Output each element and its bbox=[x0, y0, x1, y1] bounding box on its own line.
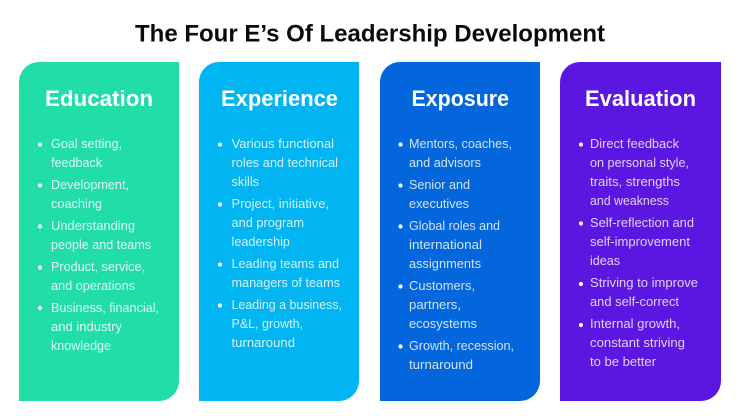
list: evaluation items: constant striving bbox=[590, 335, 685, 350]
list: experience items: managers of teams bbox=[232, 275, 340, 290]
list: experience items: Leading a business, bbox=[232, 297, 342, 312]
list: evaluation items: Striving to improve bbox=[590, 275, 698, 290]
list: experience items: Project, initiative, bbox=[232, 196, 329, 211]
list: exposure items: and advisors bbox=[409, 155, 481, 170]
list: exposure items: partners, bbox=[409, 297, 461, 312]
list: experience items: roles and technical bbox=[232, 155, 338, 170]
list: evaluation items: and weakness bbox=[590, 193, 669, 208]
list: evaluation items: on personal style, bbox=[590, 155, 689, 170]
panel: education bbox=[19, 62, 179, 401]
list: exposure items: assignments bbox=[409, 256, 481, 271]
list: evaluation items: traits, strengths bbox=[590, 174, 680, 189]
list: education items: feedback bbox=[51, 155, 102, 170]
panel: exposure bbox=[380, 62, 540, 401]
list: evaluation items: Direct feedback bbox=[590, 136, 679, 151]
list: evaluation items: ideas bbox=[590, 253, 620, 268]
list: experience items: Leading teams and bbox=[232, 256, 339, 271]
list: experience items: P&L, growth, bbox=[232, 316, 303, 331]
list: evaluation items: to be better bbox=[590, 354, 657, 369]
list: evaluation items: Internal growth, bbox=[590, 316, 680, 331]
list: education items: Goal setting, bbox=[51, 136, 122, 151]
heading: experience: Experience bbox=[221, 86, 338, 111]
list: experience items: Various functional bbox=[232, 136, 334, 151]
list: education items: Understanding bbox=[51, 218, 135, 233]
list: exposure items: Mentors, coaches, bbox=[409, 136, 512, 151]
panel: evaluation bbox=[560, 62, 721, 401]
list: experience items: turnaround bbox=[232, 335, 295, 350]
list: exposure items: ecosystems bbox=[409, 316, 477, 331]
list: exposure items: Global roles and bbox=[409, 218, 500, 233]
list: evaluation items: and self-correct bbox=[590, 294, 679, 309]
list: exposure items: international bbox=[409, 237, 482, 252]
list: education items: and operations bbox=[51, 278, 135, 293]
list: evaluation items bbox=[579, 136, 698, 369]
list: education items: coaching bbox=[51, 196, 102, 211]
list: experience items bbox=[218, 136, 342, 350]
list: evaluation items: self-improvement bbox=[590, 234, 690, 249]
heading: evaluation: Evaluation bbox=[585, 86, 696, 111]
list: education items bbox=[38, 136, 159, 353]
list: experience items: skills bbox=[232, 174, 259, 189]
list: exposure items: Customers, bbox=[409, 278, 475, 293]
heading: exposure: Exposure bbox=[412, 86, 509, 111]
list: exposure items: Senior and bbox=[409, 177, 470, 192]
list: education items: and industry bbox=[51, 319, 122, 334]
list: education items: Development, bbox=[51, 177, 129, 192]
list: experience items: leadership bbox=[232, 234, 290, 249]
list: exposure items: executives bbox=[409, 196, 469, 211]
list: exposure items bbox=[398, 136, 514, 372]
list: exposure items: Growth, recession, bbox=[409, 338, 514, 353]
panel: experience bbox=[199, 62, 359, 401]
list: education items: people and teams bbox=[51, 237, 151, 252]
list: education items: knowledge bbox=[51, 338, 111, 353]
list: education items: Business, financial, bbox=[51, 300, 159, 315]
heading: education: Education bbox=[45, 86, 153, 111]
list: education items: Product, service, bbox=[51, 259, 145, 274]
list: experience items: and program bbox=[232, 215, 304, 230]
list: evaluation items: Self-reflection and bbox=[590, 215, 694, 230]
title: The Four E’s Of Leadership Development bbox=[135, 20, 605, 48]
list: exposure items: turnaround bbox=[409, 357, 473, 372]
